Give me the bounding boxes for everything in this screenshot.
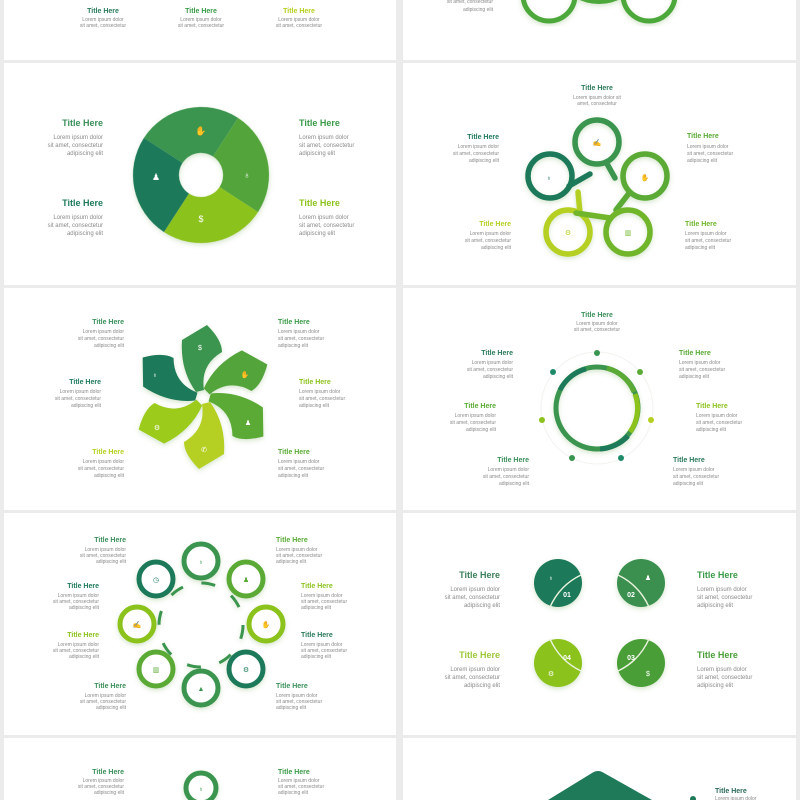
panel: four numbered circles (row3 right): 04 (563, 655, 571, 662)
panel: donut swirl (row1 left): Lorem ipsum dolor (299, 135, 349, 141)
panel: donut swirl (row1 left): adipiscing elit (67, 231, 103, 237)
panel: eight circles (row3 left): Lorem ipsum dolor (276, 547, 318, 553)
panel: donut swirl (row1 left): Lorem ipsum dolor (53, 135, 103, 141)
panel: pentagon loops (row1 right): Lorem ipsum dolor (687, 144, 729, 150)
panel: donut swirl (row1 left): $ (198, 214, 204, 224)
panel: bottom-left partial slide: Title Here (92, 769, 124, 776)
panel: ring (row2 right): Lorem ipsum dolor (679, 360, 721, 366)
panel: donut swirl (row1 left): ♟ (152, 172, 160, 182)
chart: circle ring (120, 544, 283, 705)
panel: pinwheel (row2 left): Title Here (92, 319, 124, 326)
panel: pinwheel (row2 left): Lorem ipsum dolor (299, 389, 341, 395)
panel: donut swirl (row1 left): Title Here (62, 198, 103, 208)
panel: bottom-left partial slide: sit amet, consectetur (78, 784, 124, 790)
panel: ring (row2 right): adipiscing elit (679, 374, 710, 380)
panel: pinwheel (row2 left): adipiscing elit (278, 343, 309, 349)
panel: donut swirl (row1 left): adipiscing elit (299, 231, 335, 237)
panel: top-right partial slide (447, 0, 675, 21)
chart: segmented ring (556, 367, 638, 449)
panel: eight circles (row3 left): sit amet, consectetur (276, 553, 322, 559)
panel: pentagon loops (row1 right): adipiscing elit (687, 158, 718, 164)
panel: ring (row2 right): sit amet, consectetur (673, 474, 719, 480)
panel: four numbered circles (row3 right): adipiscing elit (697, 683, 733, 689)
panel: donut swirl (row1 left): Title Here (299, 198, 340, 208)
panel: ring (row2 right): sit amet, consectetur (696, 420, 742, 426)
panel: four numbered circles (row3 right): Title Here (459, 570, 500, 580)
panel: four numbered circles (row3 right): sit amet, consectetur (697, 675, 752, 681)
panel: pentagon loops (row1 right): ✋ (641, 173, 649, 182)
panel: eight circles (row3 left): adipiscing elit (69, 605, 100, 611)
panel: bottom-left partial slide: adipiscing elit (94, 790, 125, 796)
panel: donut swirl (row1 left): sit amet, consectetur (299, 143, 354, 149)
panel: ring (row2 right): Title Here (679, 350, 711, 357)
panel: ring (row2 right): Title Here (497, 457, 529, 464)
panel: four numbered circles (row3 right): Lorem ipsum dolor (450, 667, 500, 673)
panel: donut swirl (row1 left): ♁ (244, 170, 250, 180)
panel: bottom-left partial slide: sit amet, consectetur (278, 784, 324, 790)
panel: eight circles (row3 left): sit amet, consectetur (80, 699, 126, 705)
panel: pinwheel (row2 left): sit amet, consectetur (78, 336, 124, 342)
panel: pinwheel (row2 left): Lorem ipsum dolor (83, 459, 124, 465)
panel: pentagon loops (row1 right): amet, consectetur (577, 101, 617, 107)
panel: top-left partial slide: Lorem ipsum dolor (278, 17, 320, 23)
panel: eight circles (row3 left): sit amet, consectetur (301, 648, 347, 654)
panel: eight circles (row3 left): Title Here (94, 683, 126, 690)
panel: four numbered circles (row3 right): sit amet, consectetur (697, 595, 752, 601)
panel: ring (row2 right): Lorem ipsum dolor (488, 467, 529, 473)
panel: ring (row2 right): Title Here (673, 457, 705, 464)
panel: pinwheel (row2 left) (55, 319, 345, 479)
panel: eight circles (row3 left): sit amet, consectetur (301, 599, 347, 605)
panel: ring (row2 right): Title Here (481, 350, 513, 357)
panel: eight circles (row3 left): sit amet, consectetur (80, 553, 126, 559)
panel: pentagon loops (row1 right): ♁ (546, 175, 552, 182)
panel: eight circles (row3 left): adipiscing elit (96, 559, 127, 565)
panel: donut swirl (row1 left): Title Here (62, 118, 103, 128)
panel: eight circles (row3 left): adipiscing elit (301, 605, 332, 611)
panel: ring (row2 right): adipiscing elit (499, 481, 530, 487)
panel: pinwheel (row2 left): ♁ (152, 372, 158, 379)
panel: pentagon loops (row1 right) (453, 85, 733, 254)
panel: ring (row2 right): sit amet, consectetur (467, 367, 513, 373)
panel: eight circles (row3 left): ▲ (198, 686, 204, 693)
panel: donut swirl (row1 left): ✋ (195, 125, 207, 136)
panel: top-left partial slide: sit amet, consectetur (80, 23, 126, 29)
panel: ring (row2 right): Lorem ipsum dolor (455, 413, 496, 419)
panel: ring (row2 right): sit amet, consectetur (483, 474, 529, 480)
panel: pentagon loops (row1 right): Lorem ipsum dolor (458, 144, 499, 150)
panel: pentagon loops (row1 right): Title Here (685, 221, 717, 228)
panel: pentagon loops (row1 right): sit amet, consectetur (687, 151, 733, 157)
panel: donut swirl (row1 left): Lorem ipsum dolor (53, 215, 103, 221)
panel: pinwheel (row2 left): Lorem ipsum dolor (278, 329, 320, 335)
panel: pentagon loops (row1 right): Lorem ipsum dolor sit (573, 95, 622, 101)
panel: eight circles (row3 left): Lorem ipsum dolor (301, 642, 343, 648)
panel: eight circles (row3 left): Lorem ipsum dolor (301, 593, 343, 599)
panel: pinwheel (row2 left): Title Here (299, 379, 331, 386)
panel: donut swirl (row1 left): Lorem ipsum dolor (299, 215, 349, 221)
panel: pentagon loops (row1 right): sit amet, consectetur (453, 151, 499, 157)
panel: eight circles (row3 left): Title Here (301, 583, 333, 590)
panel: four numbered circles (row3 right): Lorem ipsum dolor (697, 587, 747, 593)
panel: top-left partial slide: sit amet, consectetur (178, 23, 224, 29)
panel: bottom-right partial slide (548, 771, 757, 800)
panel: pentagon loops (row1 right): adipiscing elit (481, 245, 512, 251)
panel: pinwheel (row2 left): sit amet, consectetur (299, 396, 345, 402)
panel: eight circles (row3 left): ♁ (198, 559, 204, 566)
panel: eight circles (row3 left): sit amet, consectetur (276, 699, 322, 705)
panel: pinwheel (row2 left): ⚙ (154, 424, 160, 432)
panel: pinwheel (row2 left): Title Here (92, 449, 124, 456)
panel: pentagon loops (row1 right): ▥ (625, 230, 631, 237)
panel: four numbered circles (row3 right) (445, 559, 752, 689)
panel: donut swirl (row1 left): adipiscing elit (67, 151, 103, 157)
panel: pentagon loops (row1 right): sit amet, consectetur (465, 238, 511, 244)
panel: donut swirl (row1 left): sit amet, consectetur (48, 223, 103, 229)
panel: pinwheel (row2 left): Title Here (278, 449, 310, 456)
panel: bottom-left partial slide: Lorem ipsum dolor (278, 778, 320, 784)
panel: top-right partial slide: adipiscing elit (463, 7, 494, 13)
panel: four numbered circles (row3 right): 01 (563, 592, 571, 599)
panel: ring (row2 right): Lorem ipsum dolor (673, 467, 715, 473)
panel: four numbered circles (row3 right): adipiscing elit (464, 683, 500, 689)
panel: eight circles (row3 left): Title Here (301, 632, 333, 639)
panel: ring (row2 right): adipiscing elit (483, 374, 514, 380)
panel: eight circles (row3 left): adipiscing elit (301, 654, 332, 660)
panel: pinwheel (row2 left): Lorem ipsum dolor (60, 389, 101, 395)
panel: pinwheel (row2 left): ✋ (241, 370, 249, 379)
chart: loops (528, 120, 667, 254)
panel: ring (row2 right): Lorem ipsum dolor (696, 413, 738, 419)
panel: bottom-left partial slide: ♁ (198, 786, 204, 793)
panel: donut swirl (row1 left): Title Here (299, 118, 340, 128)
panel: four numbered circles (row3 right): adipiscing elit (697, 603, 733, 609)
panel: eight circles (row3 left): adipiscing elit (96, 705, 127, 711)
panel: eight circles (row3 left): Title Here (67, 632, 99, 639)
panel: eight circles (row3 left): Lorem ipsum dolor (85, 547, 126, 553)
panel: ring (row2 right) (450, 312, 742, 487)
panel: donut swirl (row1 left) (48, 94, 354, 256)
panel: ring (row2 right): sit amet, consectetur (450, 420, 496, 426)
panel: four numbered circles (row3 right): Title Here (697, 650, 738, 660)
panel: pentagon loops (row1 right): adipiscing elit (685, 245, 716, 251)
panel: pentagon loops (row1 right): Title Here (467, 134, 499, 141)
panel: ring (row2 right): Title Here (581, 312, 613, 319)
panel: pinwheel (row2 left): ✆ (201, 446, 207, 454)
panel: eight circles (row3 left): adipiscing elit (276, 559, 307, 565)
panel: pinwheel (row2 left): adipiscing elit (278, 473, 309, 479)
panel: pentagon loops (row1 right): sit amet, consectetur (685, 238, 731, 244)
panel: pentagon loops (row1 right): ✍ (593, 138, 602, 147)
panel: four numbered circles (row3 right): 03 (627, 655, 635, 662)
panel: four numbered circles (row3 right): Lorem ipsum dolor (450, 587, 500, 593)
panel: bottom-left partial slide: adipiscing elit (278, 790, 309, 796)
panel: pinwheel (row2 left): adipiscing elit (71, 403, 102, 409)
panel: pinwheel (row2 left): Lorem ipsum dolor (83, 329, 124, 335)
panel: eight circles (row3 left): ◷ (153, 577, 159, 584)
panel: pentagon loops (row1 right): adipiscing elit (469, 158, 500, 164)
panel: ring (row2 right): sit amet, consectetur (679, 367, 725, 373)
panel: eight circles (row3 left): Lorem ipsum dolor (85, 693, 126, 699)
panel: eight circles (row3 left): Lorem ipsum dolor (276, 693, 318, 699)
panel: ring (row2 right): adipiscing elit (673, 481, 704, 487)
panel: four numbered circles (row3 right): Title Here (697, 570, 738, 580)
panel: four numbered circles (row3 right): sit amet, consectetur (445, 675, 500, 681)
panel: bottom-left partial slide (78, 769, 324, 800)
panel: eight circles (row3 left): ✋ (262, 620, 270, 629)
chart: donut (120, 94, 282, 256)
panel: donut swirl (row1 left): sit amet, consectetur (48, 143, 103, 149)
panel: ring (row2 right): Title Here (464, 403, 496, 410)
panel: ring (row2 right): Title Here (696, 403, 728, 410)
panel: pinwheel (row2 left): sit amet, consectetur (278, 336, 324, 342)
panel: pinwheel (row2 left): Title Here (278, 319, 310, 326)
panel: pinwheel (row2 left): Title Here (69, 379, 101, 386)
panel: four numbered circles (row3 right): 02 (627, 592, 635, 599)
panel: pinwheel (row2 left): adipiscing elit (94, 343, 125, 349)
panel: pinwheel (row2 left): sit amet, consectetur (55, 396, 101, 402)
panel: ring (row2 right): adipiscing elit (696, 427, 727, 433)
panel: four numbered circles (row3 right): sit amet, consectetur (445, 595, 500, 601)
panel: pinwheel (row2 left): ♟ (245, 419, 251, 427)
panel: eight circles (row3 left): adipiscing elit (69, 654, 100, 660)
panel: eight circles (row3 left): Title Here (276, 537, 308, 544)
panel: eight circles (row3 left): ♟ (243, 576, 249, 584)
panel: pinwheel (row2 left): $ (198, 345, 202, 352)
panel: eight circles (row3 left): sit amet, consectetur (53, 599, 99, 605)
panel: eight circles (row3 left): ⚙ (243, 666, 249, 674)
panel: pentagon loops (row1 right): Lorem ipsum dolor (470, 231, 511, 237)
panel: four numbered circles (row3 right): Title Here (459, 650, 500, 660)
panel: bottom-left partial slide: Lorem ipsum dolor (83, 778, 124, 784)
panel: eight circles (row3 left): Lorem ipsum dolor (58, 593, 99, 599)
panel: eight circles (row3 left): Title Here (94, 537, 126, 544)
panel: ring (row2 right): Lorem ipsum dolor (576, 321, 618, 327)
panel: top-left partial slide: sit amet, consectetur (276, 23, 322, 29)
panel: bottom-left partial slide: Title Here (278, 769, 310, 776)
panel: four numbered circles (row3 right): adipiscing elit (464, 603, 500, 609)
panel: top-left partial slide: Lorem ipsum dolor (82, 17, 124, 23)
panel: ring (row2 right): adipiscing elit (466, 427, 497, 433)
panel: four numbered circles (row3 right): $ (646, 671, 650, 678)
panel: four numbered circles (row3 right): Lorem ipsum dolor (697, 667, 747, 673)
panel: eight circles (row3 left): ✍ (133, 620, 142, 629)
panel: donut swirl (row1 left): adipiscing elit (299, 151, 335, 157)
panel: four numbered circles (row3 right): ♁ (548, 575, 554, 582)
panel: top-left partial slide (80, 8, 322, 29)
panel: eight circles (row3 left): adipiscing elit (276, 705, 307, 711)
panel: ring (row2 right): sit amet, consectetur (574, 327, 620, 333)
panel: eight circles (row3 left): Title Here (67, 583, 99, 590)
panel: pentagon loops (row1 right): Lorem ipsum dolor (685, 231, 727, 237)
panel: pinwheel (row2 left): sit amet, consectetur (278, 466, 324, 472)
panel: eight circles (row3 left): Lorem ipsum dolor (58, 642, 99, 648)
panel: eight circles (row3 left): Title Here (276, 683, 308, 690)
panel: pentagon loops (row1 right): Title Here (687, 133, 719, 140)
panel: top-left partial slide: Title Here (283, 8, 315, 15)
panel: pinwheel (row2 left): Lorem ipsum dolor (278, 459, 320, 465)
panel: pinwheel (row2 left): sit amet, consectetur (78, 466, 124, 472)
panel: donut swirl (row1 left): sit amet, consectetur (299, 223, 354, 229)
chart: blades (130, 325, 276, 469)
panel: eight circles (row3 left): ▥ (153, 667, 159, 674)
panel: pinwheel (row2 left): adipiscing elit (94, 473, 125, 479)
panel: pentagon loops (row1 right): Title Here (479, 221, 511, 228)
panel: top-left partial slide: Lorem ipsum dolor (180, 17, 222, 23)
panel: eight circles (row3 left): sit amet, consectetur (53, 648, 99, 654)
panel: pentagon loops (row1 right): Title Here (581, 85, 613, 92)
panel: pentagon loops (row1 right): ⚙ (565, 229, 571, 237)
panel: top-left partial slide: Title Here (185, 8, 217, 15)
panel: top-left partial slide: Title Here (87, 8, 119, 15)
panel: ring (row2 right): Lorem ipsum dolor (472, 360, 513, 366)
panel: four numbered circles (row3 right): ♟ (645, 574, 651, 582)
panel: bottom-right partial slide: Title Here (715, 788, 747, 795)
panel: eight circles (row3 left) (53, 537, 347, 711)
panel: four numbered circles (row3 right): ⚙ (548, 670, 554, 678)
panel: pinwheel (row2 left): adipiscing elit (299, 403, 330, 409)
